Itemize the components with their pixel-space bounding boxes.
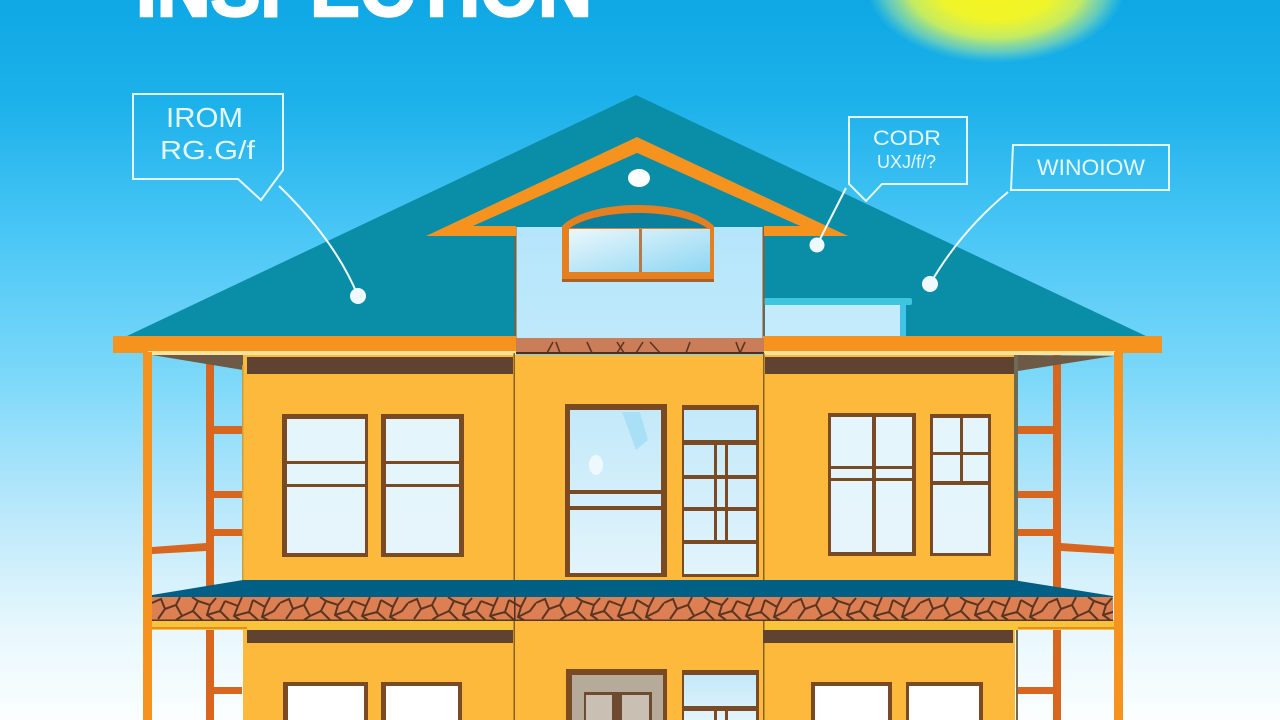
door (566, 669, 667, 720)
window: upper left 2 (381, 414, 464, 557)
window: lower left 1 (283, 682, 368, 720)
callout: left: IROM (166, 102, 243, 133)
callout: window (922, 145, 1169, 292)
callout: left: RG.G/f (160, 135, 256, 165)
window: upper centre large (565, 404, 667, 577)
upper gable wall (514, 227, 764, 353)
window: upper right 1 (828, 413, 916, 556)
callout: centre right (810, 117, 967, 252)
callout: left (133, 94, 366, 304)
eaves (113, 336, 1162, 355)
window: lower right 1 (811, 682, 892, 720)
sun (866, 0, 1126, 63)
callout: centre right: UXJ/f/? (877, 152, 936, 172)
brick strip under gable (516, 338, 764, 354)
window: upper right 2 (930, 414, 991, 556)
callout: window: WINOIOW (1037, 155, 1145, 180)
shadow bands under eaves (247, 357, 1014, 374)
balcony teal roof (152, 580, 1113, 598)
gable trim (426, 137, 848, 236)
gable dot marker (628, 169, 650, 187)
window: lower left 2 (381, 682, 462, 720)
window: lower centre grid (682, 670, 759, 720)
right scaffold posts (1018, 352, 1123, 720)
stone band (152, 597, 1113, 621)
main roof (125, 95, 1148, 337)
balcony yellow strip (152, 620, 1114, 630)
window: upper centre grid (682, 405, 759, 577)
lower storey walls (243, 620, 1018, 720)
small side roof box (764, 298, 912, 336)
upper storey walls (242, 353, 1018, 581)
dormer window (562, 205, 714, 282)
window: upper left 1 (282, 414, 368, 557)
callout: centre right: CODR (873, 127, 941, 150)
eave undersides (152, 355, 1113, 371)
left scaffold posts (143, 352, 242, 720)
lower shadow bands (247, 630, 1013, 643)
window: lower right 2 (906, 682, 983, 720)
